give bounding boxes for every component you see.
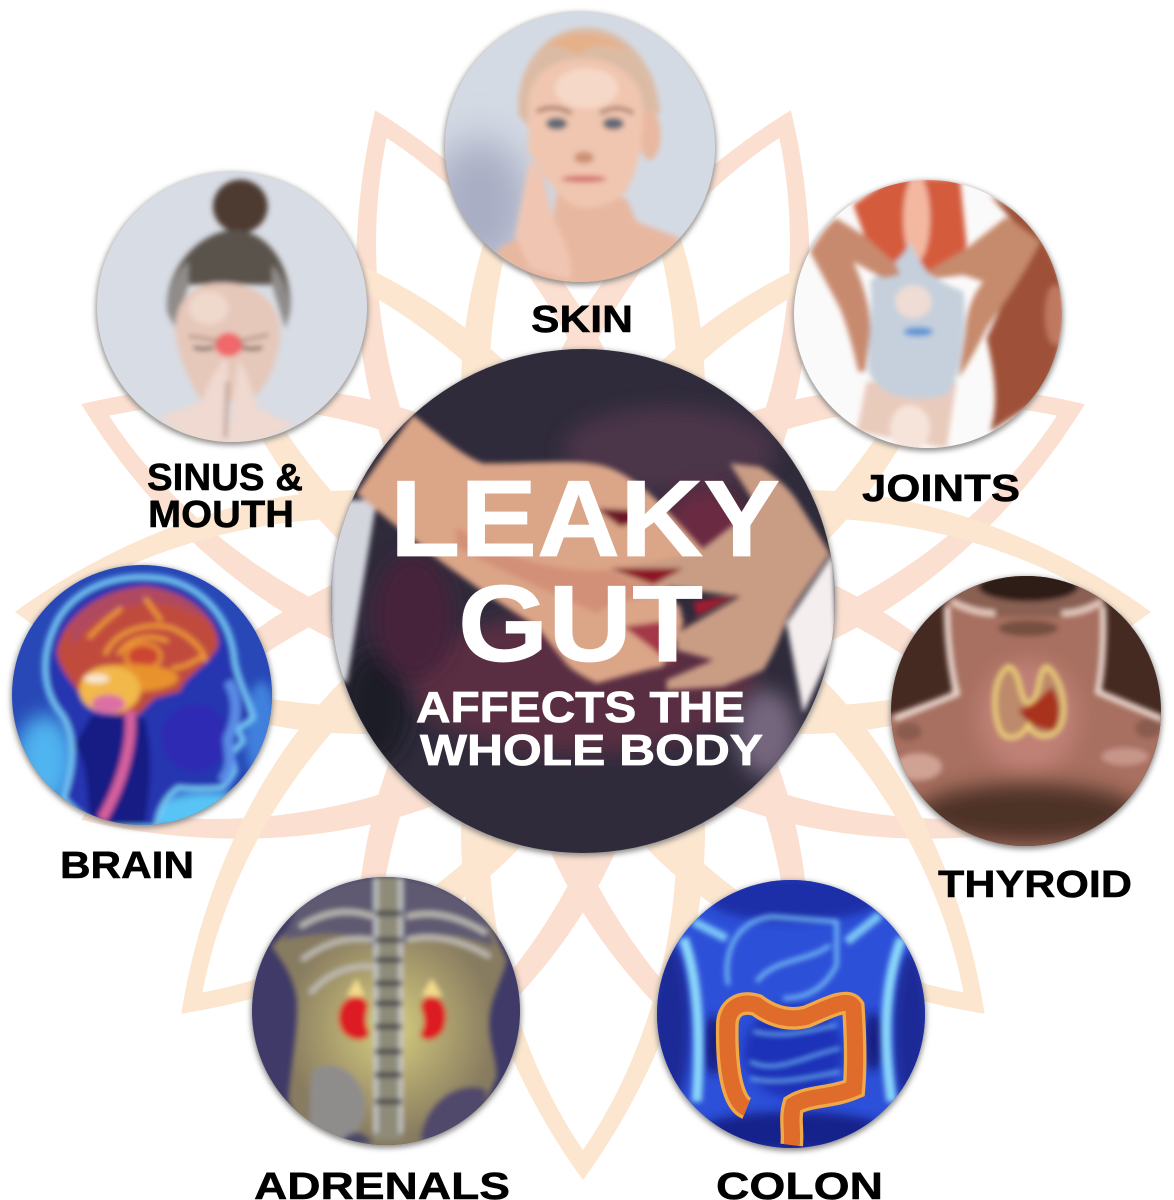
title line: GUT: GUT: [458, 563, 703, 685]
label: sinus and mouth: SINUS &: [147, 457, 303, 499]
label: skin: SKIN: [531, 299, 633, 341]
photo: thyroid: [882, 567, 1168, 853]
label: sinus and mouth: [147, 457, 303, 536]
title line: LEAKY: LEAKY: [390, 458, 780, 580]
label: thyroid: THYROID: [938, 864, 1132, 906]
center title: [390, 458, 780, 775]
label: joints: JOINTS: [862, 468, 1020, 510]
subtitle line: WHOLE BODY: WHOLE BODY: [420, 726, 763, 775]
label: sinus and mouth: MOUTH: [148, 494, 294, 536]
photo: skin: [430, 2, 723, 288]
subtitle line: AFFECTS THE: AFFECTS THE: [416, 683, 745, 732]
photo: adrenals: [247, 873, 527, 1153]
photo: brain: [7, 562, 277, 832]
central photo: hands on belly: [327, 340, 840, 860]
body labels: [60, 299, 1132, 1200]
photo: colon: [647, 872, 933, 1158]
photo: joints: [787, 172, 1073, 458]
photo: sinus and mouth: [89, 165, 375, 451]
label: brain: BRAIN: [60, 845, 194, 887]
